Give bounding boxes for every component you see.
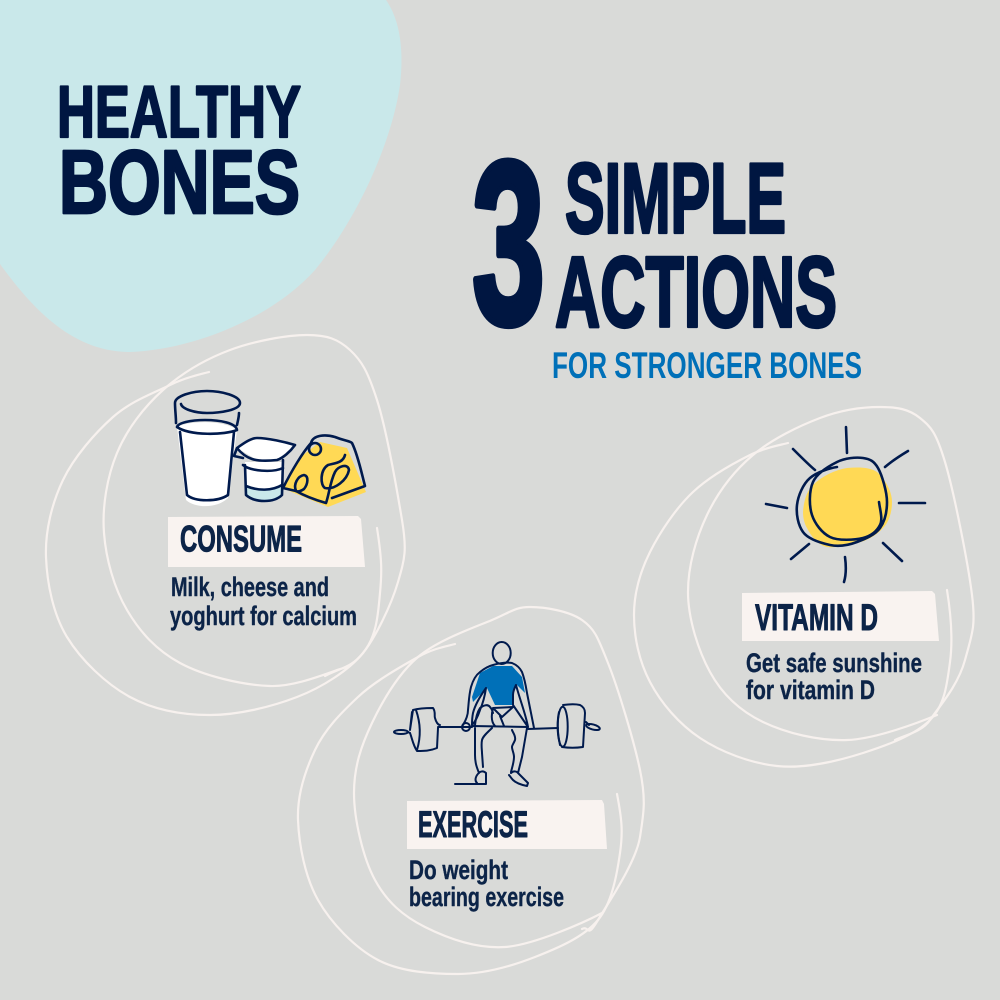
label: vitamin d: VITAMIN D (755, 597, 878, 638)
text: consume (170, 572, 357, 631)
heading: 3 simple actions: SIMPLE (565, 142, 786, 254)
heading: 3 simple actions (472, 114, 862, 386)
background blob (0, 0, 401, 352)
text: consume: yoghurt for calcium (170, 601, 357, 631)
title: HEALTHY (57, 72, 301, 153)
panel: vitamin d (634, 407, 974, 767)
label: exercise: EXERCISE (418, 804, 528, 845)
scribble ring: vitamin d (634, 407, 974, 767)
text: vitamin d: Get safe sunshine (746, 648, 922, 678)
figure line drawing (394, 642, 600, 786)
cheese wedge (282, 435, 366, 507)
heading: 3 simple actions: 3 (472, 114, 545, 373)
icon: dairy foods (175, 391, 366, 507)
text: consume: Milk, cheese and (171, 572, 329, 602)
title (57, 72, 301, 233)
heading: 3 simple actions: ACTIONS (555, 236, 837, 348)
icon: weightlifter (394, 642, 600, 786)
title: BONES (59, 133, 300, 233)
text: exercise: Do weight (409, 855, 508, 885)
heading: 3 simple actions: FOR STRONGER BONES (552, 345, 862, 386)
panel: consume (46, 335, 405, 715)
icon: sun (766, 427, 925, 582)
label: consume: CONSUME (180, 518, 302, 560)
text: vitamin d (746, 648, 922, 705)
scribble ring: exercise (298, 607, 644, 974)
text: vitamin d: for vitamin D (746, 675, 875, 705)
shirt (472, 666, 525, 705)
yoghurt pot (234, 438, 295, 501)
scribble ring: consume (46, 335, 405, 715)
text: exercise: bearing exercise (409, 882, 564, 912)
glass of milk (175, 391, 240, 506)
text: exercise (409, 855, 564, 912)
panel: exercise (298, 607, 644, 974)
